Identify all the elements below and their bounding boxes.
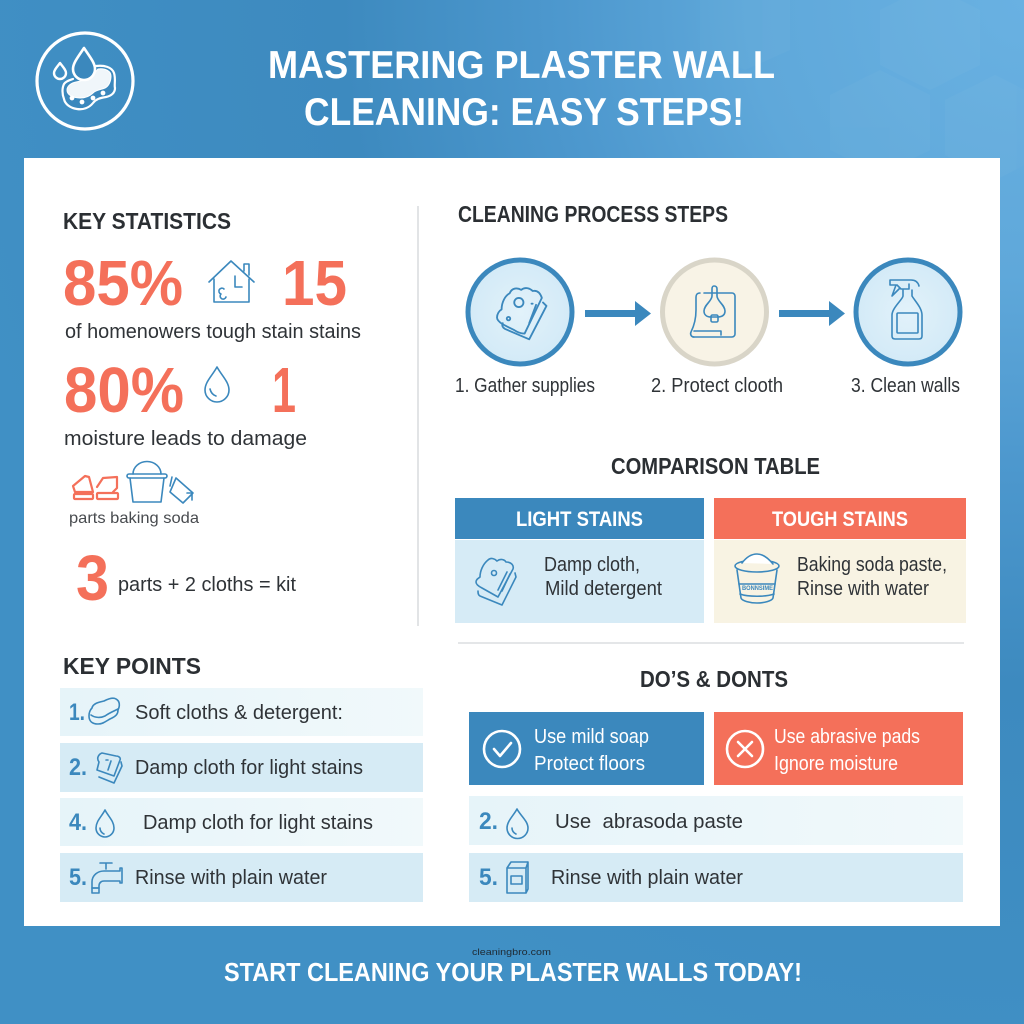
arrow bbox=[585, 301, 651, 326]
row: abrasoda paste: 2. bbox=[479, 808, 498, 835]
row: rinse bbox=[469, 853, 963, 902]
stat: 3: 3 bbox=[76, 542, 109, 614]
row 2: 2. bbox=[69, 754, 87, 781]
do box: Use mild soap bbox=[534, 726, 649, 748]
row 3 bbox=[60, 798, 423, 846]
don't box bbox=[714, 712, 963, 785]
panel: comparison table bbox=[455, 453, 966, 623]
text: parts baking soda: parts baking soda bbox=[69, 510, 199, 527]
icon: supplies group bbox=[73, 461, 193, 503]
row: abrasoda paste: Use abrasoda paste bbox=[555, 811, 743, 833]
text: moisture: moisture leads to damage bbox=[64, 428, 307, 450]
row 1 bbox=[60, 688, 423, 736]
label: 3. Clean walls bbox=[851, 375, 960, 397]
heading: key statistics: KEY STATISTICS bbox=[63, 208, 231, 234]
column: tough stains bbox=[714, 498, 966, 623]
heading: comparison table: COMPARISON TABLE bbox=[611, 453, 820, 479]
row: rinse: 5. bbox=[479, 864, 498, 891]
panel: do's and don'ts bbox=[469, 666, 963, 902]
column: light stains: Damp cloth, bbox=[544, 554, 640, 576]
row 1: 1. bbox=[69, 699, 85, 726]
step 3 bbox=[851, 260, 960, 397]
row 4: 5. bbox=[69, 864, 87, 891]
row 2 bbox=[60, 743, 423, 792]
stat: 15: 15 bbox=[282, 247, 347, 319]
heading: key points: KEY POINTS bbox=[63, 653, 201, 679]
step 1 bbox=[455, 260, 595, 397]
vertical divider bbox=[417, 206, 419, 626]
text: homeowners: of homenowers tough stain stains bbox=[65, 321, 361, 343]
column: tough stains: Baking soda paste, bbox=[797, 554, 947, 576]
row: rinse: Rinse with plain water bbox=[551, 867, 743, 889]
row 3: 4. bbox=[69, 809, 87, 836]
main white panel bbox=[24, 158, 1000, 926]
label: 2. Protect clooth bbox=[651, 375, 783, 397]
step 2 bbox=[651, 260, 783, 397]
horizontal divider bbox=[458, 642, 964, 644]
icon: baking soda tub bbox=[735, 554, 779, 603]
row 4: Rinse with plain water bbox=[135, 867, 327, 889]
title: CLEANING: EASY STEPS! bbox=[304, 91, 744, 134]
heading: do's and don'ts: DO’S & DONTS bbox=[640, 666, 788, 692]
source credit: cleaningbro.com bbox=[472, 947, 551, 958]
title bbox=[268, 44, 775, 134]
footer call to action: START CLEANING YOUR PLASTER WALLS TODAY! bbox=[224, 957, 802, 987]
row: abrasoda paste bbox=[469, 796, 963, 845]
panel: key points bbox=[60, 653, 423, 902]
column: light stains: Mild detergent bbox=[545, 578, 662, 600]
stat: 1: 1 bbox=[272, 354, 296, 426]
heading: process steps: CLEANING PROCESS STEPS bbox=[458, 201, 728, 227]
row 2: Damp cloth for light stains bbox=[135, 757, 363, 779]
title: MASTERING PLASTER WALL bbox=[268, 44, 775, 87]
panel: key statistics bbox=[63, 208, 361, 614]
icon: logo with drops and sponge bbox=[37, 33, 133, 129]
text: kit: parts + 2 cloths = kit bbox=[118, 574, 296, 596]
icon: water drop bbox=[205, 367, 229, 402]
column: light stains: LIGHT STAINS bbox=[516, 508, 643, 531]
column: tough stains: Rinse with water bbox=[797, 578, 929, 600]
do box: Protect floors bbox=[534, 753, 645, 775]
icon: baking soda tub: BONNSIME bbox=[742, 586, 773, 592]
icon: cloth bbox=[476, 558, 516, 605]
do box bbox=[469, 712, 704, 785]
don't box: Ignore moisture bbox=[774, 753, 898, 775]
label: 1. Gather supplies bbox=[455, 375, 595, 397]
stat: 85%: 85% bbox=[63, 247, 183, 319]
column: tough stains: TOUGH STAINS bbox=[772, 508, 908, 531]
column: light stains bbox=[455, 498, 704, 623]
row 3: Damp cloth for light stains bbox=[143, 812, 373, 834]
row 1: Soft cloths & detergent: bbox=[135, 702, 343, 724]
arrow bbox=[779, 301, 845, 326]
row 4 bbox=[60, 853, 423, 902]
icon: house bbox=[209, 261, 254, 302]
don't box: Use abrasive pads bbox=[774, 726, 920, 748]
stat: 80%: 80% bbox=[64, 354, 184, 426]
panel: cleaning process steps bbox=[455, 201, 960, 397]
